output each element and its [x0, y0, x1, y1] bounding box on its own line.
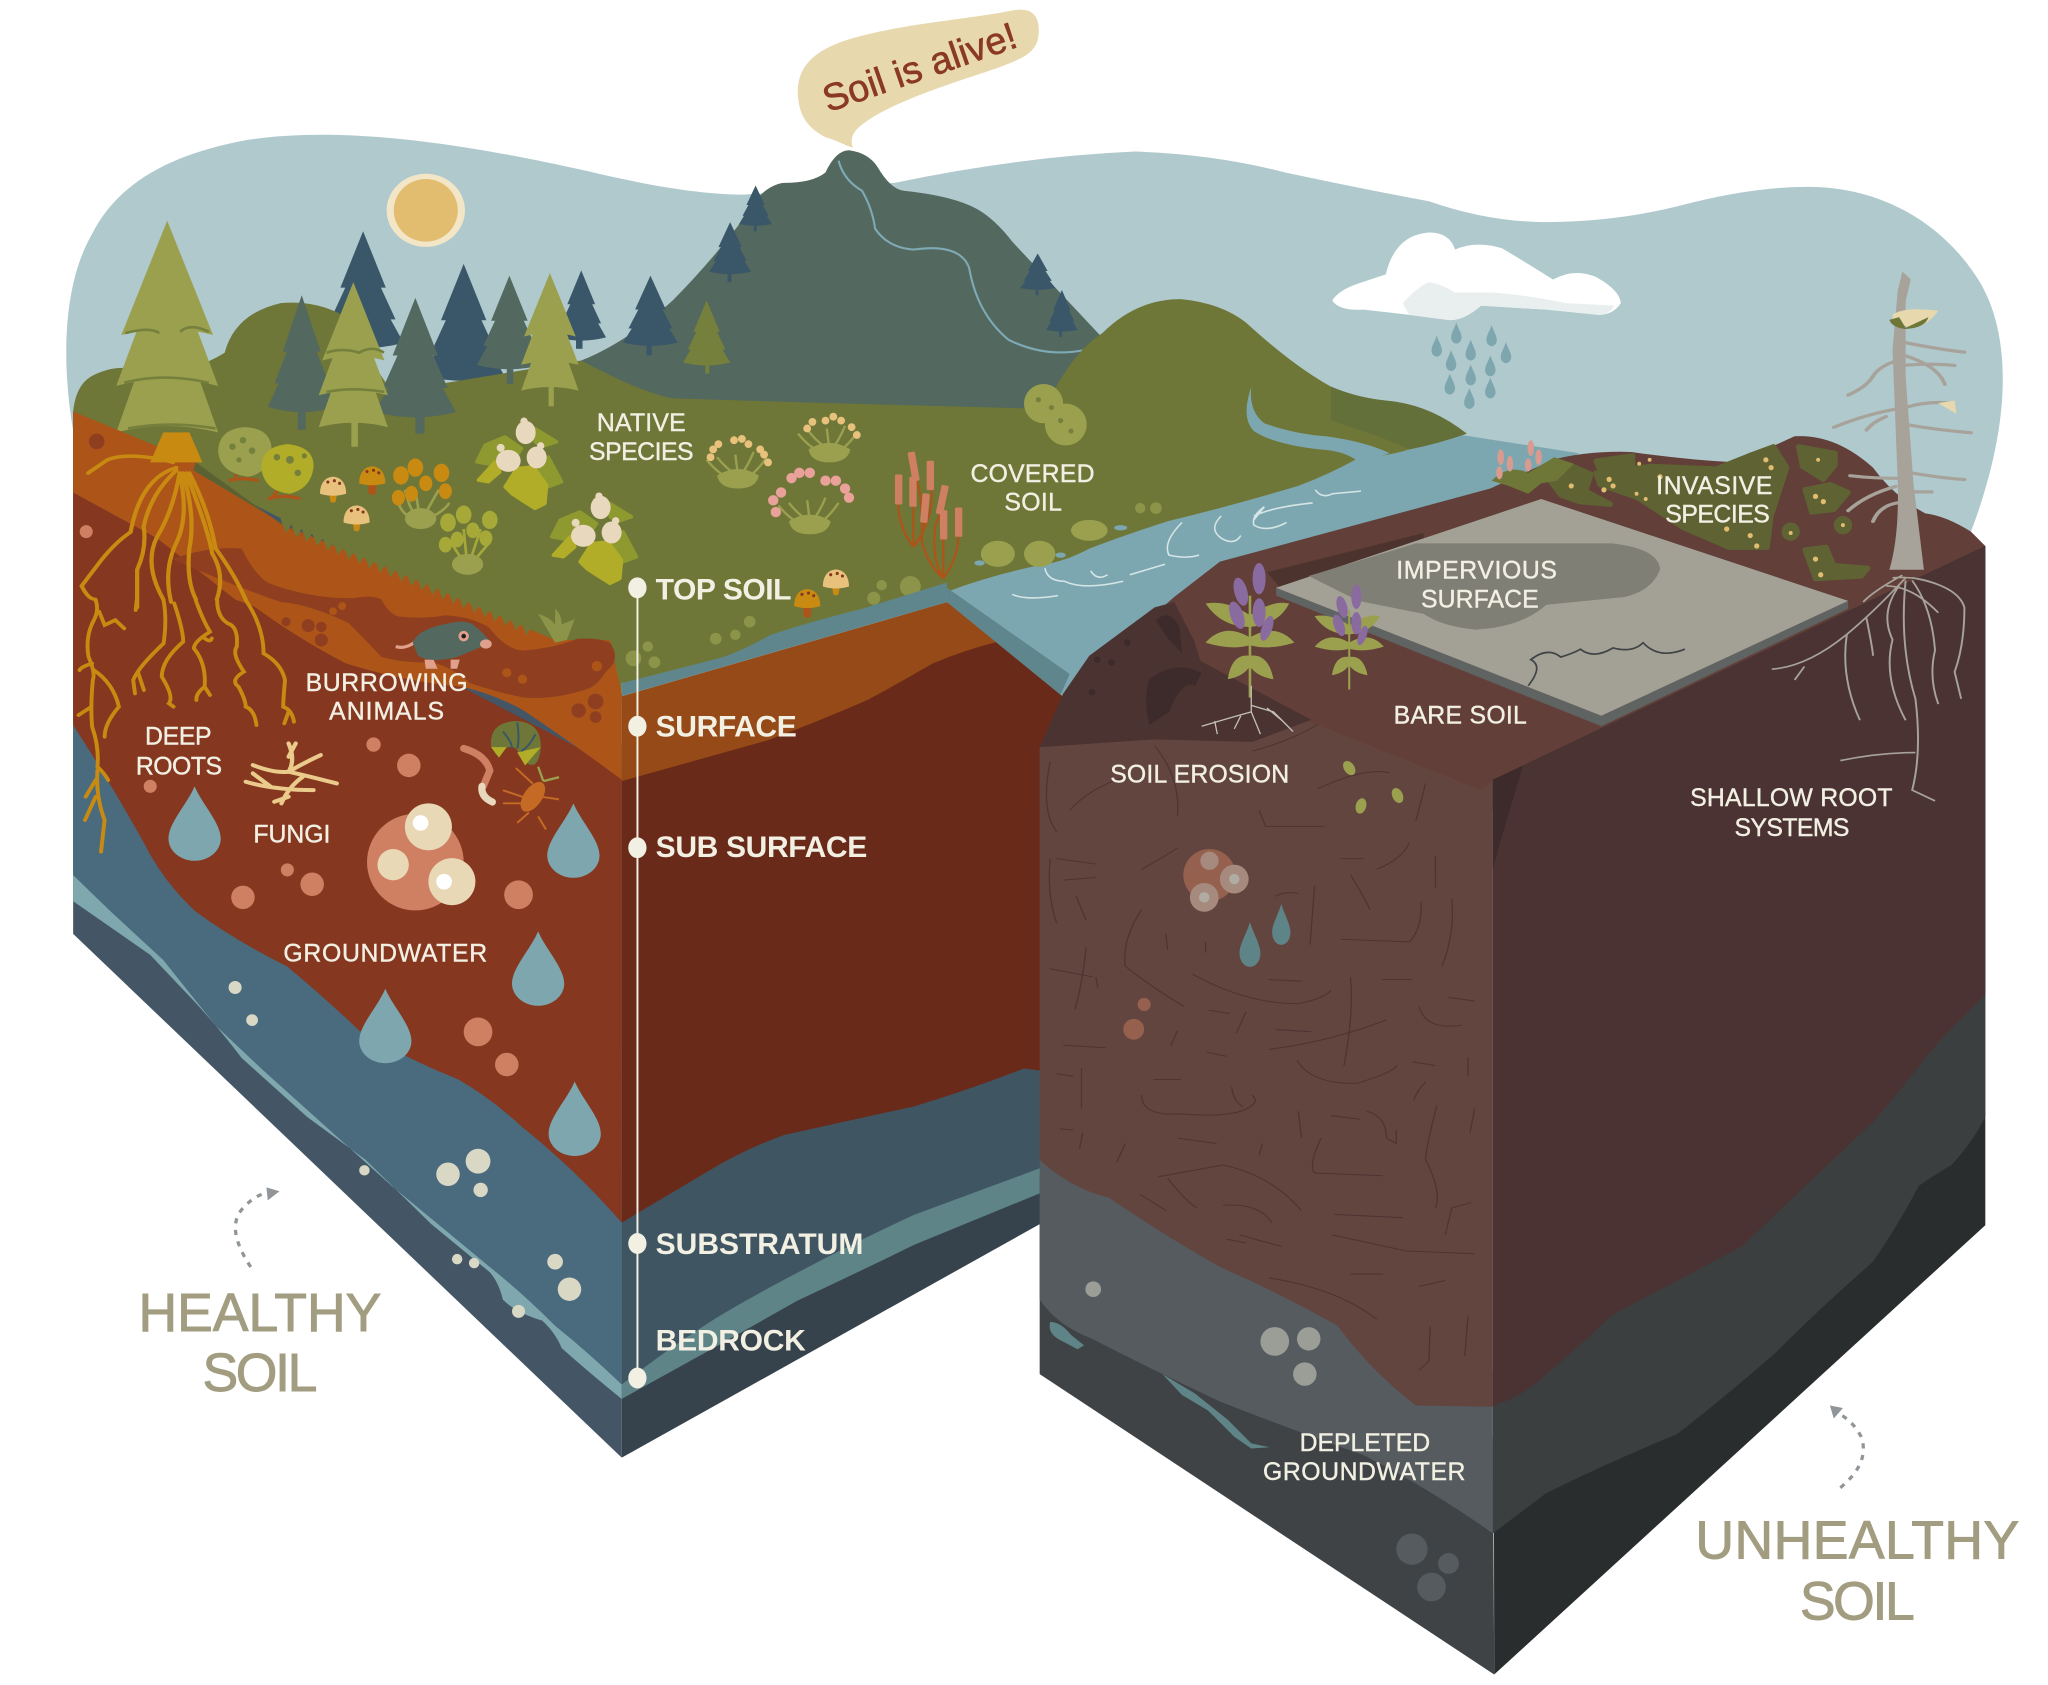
sky [66, 135, 2003, 614]
invasive yellow flecks [1558, 457, 1845, 577]
label: deep roots: DEEP [145, 724, 212, 751]
right hill bushes [1024, 384, 1087, 445]
label: invasive species: INVASIVE [1656, 473, 1772, 500]
sun [387, 174, 465, 247]
big pine trunk [150, 432, 202, 462]
purple plant small [1315, 585, 1384, 689]
label: burrowing animals: BURROWING [306, 670, 468, 697]
earthworm tail [482, 786, 492, 802]
earthworm [464, 748, 490, 786]
fungi [246, 743, 337, 803]
left block left face [73, 411, 622, 1458]
back forest pines [323, 186, 1078, 394]
eroded soil edge [1040, 602, 1311, 747]
eroded soil sphere [1183, 849, 1249, 912]
dashed arrow unhealthy [1830, 1405, 1863, 1488]
yellow flowers [439, 506, 498, 575]
label: fungi: FUNGI [253, 821, 330, 848]
label: impervious surface: SURFACE [1421, 586, 1539, 613]
right block faces [1040, 436, 1985, 1674]
label: invasive species [1656, 473, 1772, 528]
grub [491, 721, 541, 765]
grass sprout [538, 609, 575, 643]
purple plant large [1206, 563, 1294, 698]
tiny leaves [1340, 759, 1406, 815]
title: healthy soil: HEALTHY [138, 1284, 381, 1343]
erosion marks [1089, 615, 1202, 725]
deep roots upper [82, 456, 246, 607]
water drops [168, 786, 601, 1156]
invasive species patches [1549, 447, 1868, 579]
label: deep roots [136, 724, 222, 781]
river [947, 431, 1579, 705]
big nutrient sphere [367, 803, 475, 910]
left block right face [622, 583, 1084, 1458]
dashed arrow healthy [235, 1187, 280, 1267]
label: soil erosion: SOIL EROSION [1110, 761, 1289, 788]
impervious slab [1276, 499, 1848, 726]
orange pebbles in dark band [272, 558, 602, 684]
label: covered soil: SOIL [1004, 490, 1062, 517]
label: groundwater: GROUNDWATER [283, 940, 487, 967]
speech text: Soil is alive! [817, 15, 1022, 121]
label: impervious surface: IMPERVIOUS [1396, 558, 1557, 585]
green land and hills [73, 299, 1467, 705]
white flower plants [477, 418, 637, 583]
label: depleted groundwater: GROUNDWATER [1263, 1459, 1465, 1486]
label: shallow root systems: SYSTEMS [1735, 815, 1849, 842]
tan and pink flower tufts [707, 413, 861, 534]
title: healthy soil: SOIL [202, 1344, 317, 1403]
depleted stones [1085, 1281, 1459, 1601]
label: shallow root systems: SHALLOW ROOT [1690, 785, 1893, 812]
small plant roots [1202, 686, 1293, 734]
label: depleted groundwater: DEPLETED [1300, 1430, 1430, 1457]
label: covered soil: COVERED [970, 461, 1095, 488]
label: top soil: TOP SOIL [656, 574, 792, 607]
cloud [1332, 233, 1621, 320]
speech bubble [798, 10, 1039, 148]
dead tree [1834, 271, 1971, 570]
dead tree roots [1772, 575, 1964, 801]
label: depleted groundwater [1263, 1430, 1465, 1486]
cattails [895, 451, 962, 578]
substratum stones [229, 981, 581, 1318]
rain drops [1432, 323, 1511, 409]
faded pebbles [1123, 998, 1151, 1040]
title: healthy soil [138, 1284, 381, 1403]
label: burrowing animals: ANIMALS [329, 699, 444, 726]
olive pines [116, 221, 579, 447]
small hill pine [683, 300, 730, 374]
burrowing mole [396, 622, 492, 669]
lily pads [974, 520, 1127, 567]
title: unhealthy soil: SOIL [1800, 1573, 1915, 1632]
label: burrowing animals [306, 670, 468, 726]
orange flowers [392, 458, 452, 529]
pink invasive plants [1492, 440, 1574, 494]
dark edge behind slab [1267, 533, 1424, 588]
label: native species: SPECIES [589, 439, 694, 466]
soil circles [80, 525, 533, 1076]
label: sub surface: SUB SURFACE [656, 831, 867, 864]
label: native species: NATIVE [597, 410, 686, 437]
pine shade marks [124, 327, 384, 428]
soil cracks [1046, 724, 1475, 1370]
small drops [1240, 904, 1290, 967]
label: surface: SURFACE [656, 711, 797, 744]
mushrooms [320, 466, 849, 618]
deep roots lower [79, 600, 294, 852]
label: native species [589, 410, 694, 466]
label: bedrock: BEDROCK [656, 1325, 806, 1358]
title: unhealthy soil: UNHEALTHY [1695, 1511, 2019, 1570]
mid forest pines [268, 276, 542, 434]
depleted water streaks [1050, 1322, 1270, 1449]
darker hill shoulder [1331, 387, 1467, 449]
green dots [626, 502, 1162, 668]
label: covered soil [970, 461, 1095, 517]
layer timeline [628, 577, 647, 1388]
soil pebbles in orange band [89, 434, 603, 723]
title: unhealthy soil [1695, 1511, 2019, 1632]
label: deep roots: ROOTS [136, 754, 222, 781]
left bushes [218, 427, 314, 499]
grass edge [193, 462, 555, 635]
label: invasive species: SPECIES [1665, 501, 1770, 528]
label: shallow root systems [1690, 785, 1893, 842]
beetle [503, 767, 559, 829]
river branch [1247, 387, 1390, 462]
mountain [581, 150, 1110, 418]
label: substratum: SUBSTRATUM [656, 1228, 863, 1261]
mountain stream line [839, 161, 1256, 392]
label: bare soil: BARE SOIL [1394, 703, 1527, 730]
label: impervious surface [1396, 558, 1557, 613]
river ripples [1012, 490, 1361, 598]
